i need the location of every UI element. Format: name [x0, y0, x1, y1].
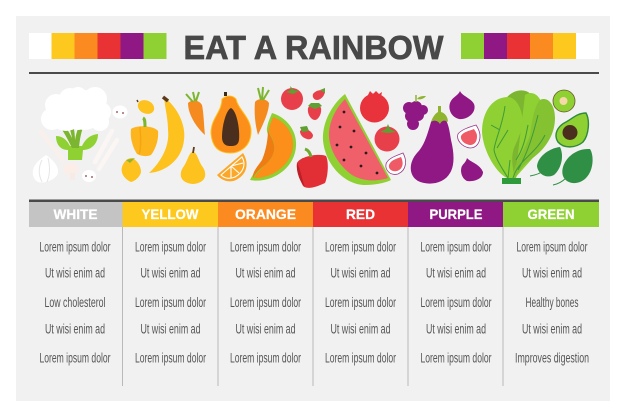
column: yellow: Ut wisi enim ad — [140, 266, 200, 280]
column: green: GREEN — [528, 206, 574, 222]
icon: pomegranate — [360, 91, 389, 122]
column: red — [313, 202, 408, 366]
column: white: Lorem ipsum dolor — [40, 240, 111, 254]
column: green: Ut wisi enim ad — [522, 266, 582, 280]
icon: spinach leaves — [530, 147, 593, 185]
icon: papaya — [211, 92, 251, 153]
icon: lettuce — [482, 90, 555, 184]
column: white: Ut wisi enim ad — [45, 266, 105, 280]
column: yellow — [122, 202, 218, 366]
icon: sliced fig — [386, 153, 406, 174]
column: white: Low cholesterol — [44, 295, 106, 310]
icon: eggplant — [411, 106, 454, 184]
column: red: RED — [346, 206, 375, 222]
icon: carrot — [186, 92, 205, 135]
column: red: Lorem ipsum dolor — [325, 350, 396, 366]
icon: cantaloupe wedge — [250, 113, 296, 181]
column: green: Improves digestion — [515, 350, 589, 366]
icon: grapes — [403, 95, 428, 130]
icon: avocado — [556, 113, 588, 147]
column: white — [29, 202, 122, 366]
column: white: WHITE — [54, 206, 98, 222]
column: purple: Ut wisi enim ad — [426, 266, 486, 280]
icon: orange slice — [217, 153, 247, 181]
column: orange: Ut wisi enim ad — [236, 322, 296, 336]
column: yellow: Lorem ipsum dolor — [135, 295, 206, 310]
column: red: Lorem ipsum dolor — [325, 240, 396, 254]
column: purple: Ut wisi enim ad — [426, 322, 486, 336]
icon: kiwi — [553, 90, 575, 112]
column: orange: Lorem ipsum dolor — [230, 240, 301, 254]
column: yellow: Ut wisi enim ad — [140, 322, 200, 336]
column: orange: Ut wisi enim ad — [236, 266, 296, 280]
icon: pear — [181, 147, 205, 184]
left colour stripe — [29, 33, 166, 59]
column: green — [503, 202, 599, 366]
right colour stripe — [461, 33, 599, 59]
column: green: Healthy bones — [526, 295, 579, 310]
column: white: Lorem ipsum dolor — [40, 350, 111, 366]
icon: yellow pepper — [131, 118, 158, 156]
column: yellow: Lorem ipsum dolor — [135, 240, 206, 254]
illustration: row of fruit and vegetables — [33, 86, 593, 188]
column: orange: Lorem ipsum dolor — [230, 295, 301, 310]
column: yellow: Lorem ipsum dolor — [135, 350, 206, 366]
icon: banana — [149, 97, 184, 173]
icon: tomato — [281, 86, 303, 110]
icon: figs — [449, 91, 483, 181]
column: purple: Lorem ipsum dolor — [420, 350, 492, 366]
column: green: Lorem ipsum dolor — [516, 240, 588, 254]
icon: carrot — [255, 87, 269, 135]
column: orange: Lorem ipsum dolor — [230, 350, 301, 366]
icon: tomato — [374, 124, 400, 152]
icon: cauliflower — [41, 87, 111, 160]
icon: strawberries — [300, 88, 325, 139]
title: EAT A RAINBOW — [184, 30, 444, 67]
column: orange — [218, 202, 313, 366]
icon: red pepper — [297, 149, 328, 188]
table — [29, 200, 599, 386]
icon: watermelon slice — [323, 94, 391, 185]
column: purple: Lorem ipsum dolor — [420, 240, 492, 254]
column: green: Ut wisi enim ad — [522, 322, 582, 336]
icon: white asparagus and mushrooms — [33, 106, 128, 183]
column: purple — [408, 202, 503, 366]
icon: yellow lemons — [122, 98, 156, 182]
column: red: Lorem ipsum dolor — [325, 295, 396, 310]
column dividers — [122, 227, 503, 386]
column: orange: ORANGE — [235, 206, 296, 222]
column: red: Ut wisi enim ad — [330, 322, 390, 336]
column: purple: Lorem ipsum dolor — [420, 295, 492, 310]
column: yellow: YELLOW — [142, 206, 199, 222]
column: red: Ut wisi enim ad — [330, 266, 390, 280]
column: purple: PURPLE — [430, 206, 482, 222]
column: white: Ut wisi enim ad — [45, 322, 105, 336]
